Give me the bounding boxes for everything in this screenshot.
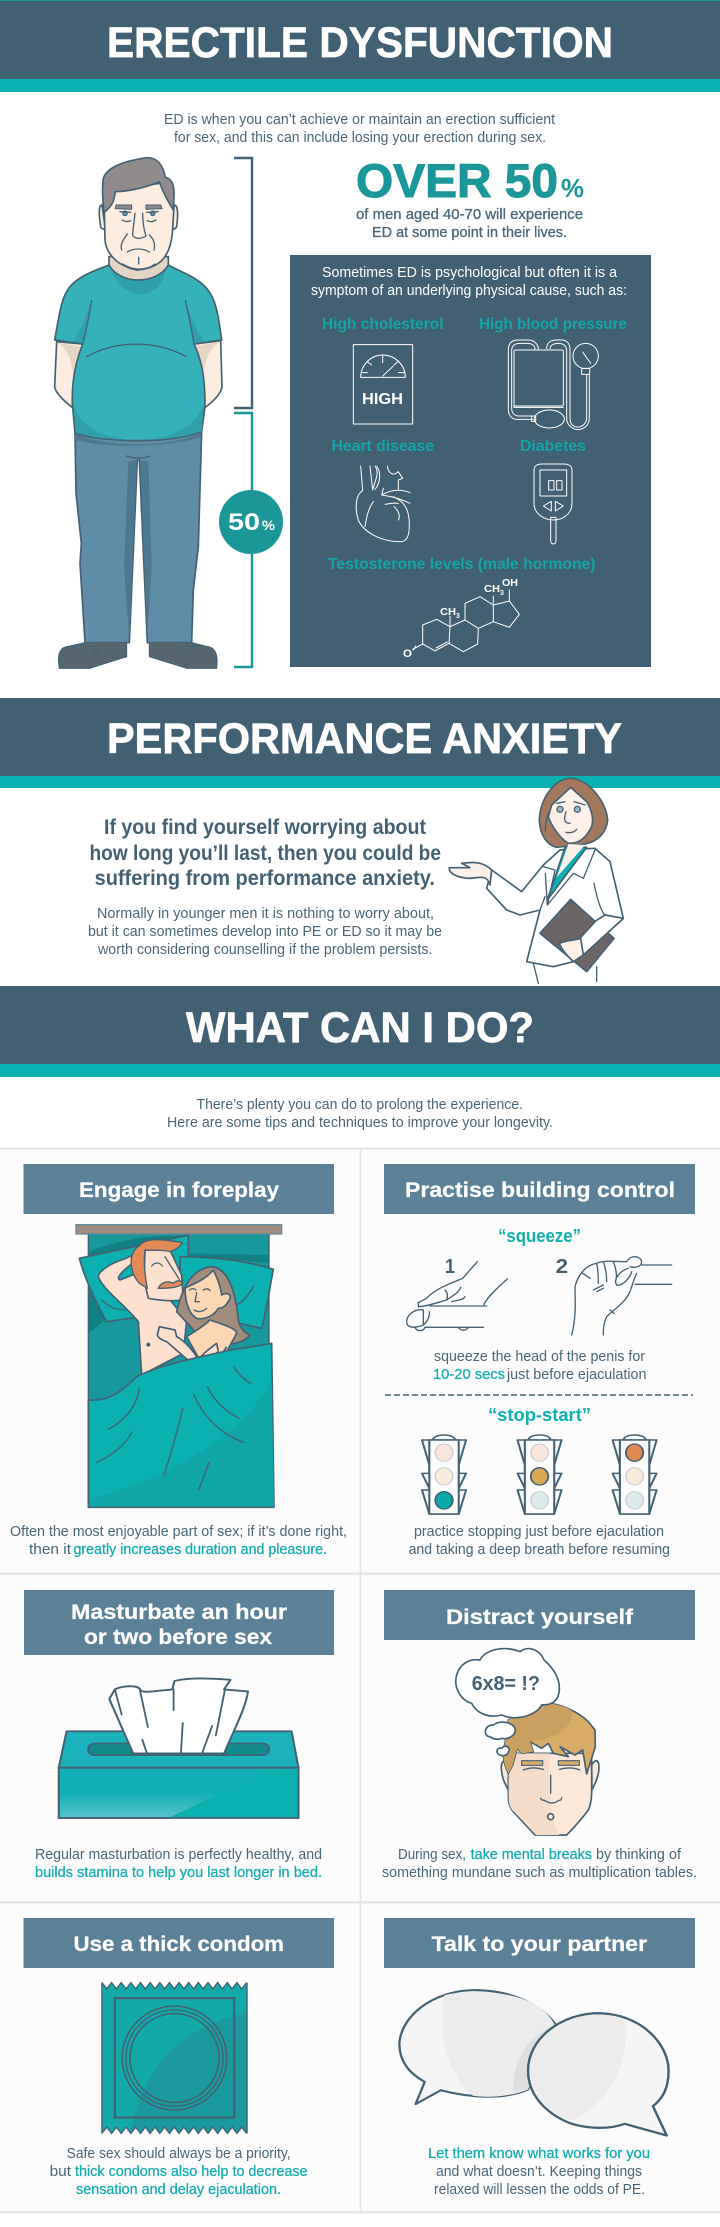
icon: testosterone molecule: O: [403, 648, 412, 660]
bracket: 50 percent of men: %: [262, 517, 276, 533]
heading: practise building control: Practise building control: [405, 1179, 675, 1202]
icon: high gauge: [353, 345, 413, 424]
caption: foreplay: greatly increases duration and pleasure.: [74, 1542, 327, 1558]
heading: distract yourself: [384, 1590, 695, 1640]
caption: condom: thick condoms also help to decrease: [75, 2164, 308, 2180]
illustration: tissue box: [59, 1678, 298, 1818]
heading: masturbate: or two before sex: [84, 1626, 272, 1649]
label: squeeze: “squeeze”: [498, 1226, 581, 1246]
caption: condom: [50, 2146, 308, 2198]
panel: physical causes: [290, 255, 651, 667]
panel: physical causes: Heart disease: [332, 438, 434, 455]
caption: stop-start: and taking a deep breath before resuming: [409, 1542, 670, 1558]
text block: performance anxiety: worth considering counselling if the problem persists.: [97, 942, 432, 958]
panel: physical causes: Sometimes ED is psychological but often it is a: [322, 265, 618, 281]
icon: high gauge: HIGH: [362, 391, 403, 408]
caption: condom: Safe sex should always be a priority,: [67, 2146, 291, 2162]
illustration: standing man: [55, 158, 222, 668]
illustration: condom packet: [101, 1981, 248, 2136]
stat: over 50 percent: %: [561, 173, 584, 203]
heading: talk to your partner: [384, 1918, 695, 1968]
intro text: [164, 112, 555, 146]
icon: blood pressure cuff: [508, 340, 598, 430]
header: performance anxiety: [0, 698, 720, 788]
label: stop-start: “stop-start”: [488, 1405, 591, 1425]
stat: over 50 percent: [356, 154, 584, 241]
text block: performance anxiety: how long you’ll last, then you could be: [90, 842, 441, 865]
header: erectile dysfunction: [0, 0, 720, 92]
caption: squeeze: [433, 1349, 646, 1383]
caption: masturbation: builds stamina to help you last longer in bed.: [35, 1865, 322, 1881]
text block: performance anxiety: Normally in younger men it is nothing to worry about,: [97, 906, 434, 922]
intro text: ED is when you can’t achieve or maintain an erection sufficient: [164, 112, 555, 128]
caption: stop-start: [409, 1524, 670, 1558]
tips grid background: [0, 1148, 720, 2214]
text block: performance anxiety: but it can sometimes develop into PE or ED so it may be: [88, 924, 442, 940]
panel: physical causes: Testosterone levels (male hormone): [328, 556, 596, 573]
caption: distract: [382, 1847, 697, 1881]
caption: foreplay: then it: [29, 1542, 71, 1558]
caption: distract: take mental breaks: [471, 1847, 592, 1863]
panel: physical causes: High cholesterol: [322, 316, 444, 333]
caption: partner: Let them know what works for you: [428, 2146, 650, 2162]
caption: stop-start: practice stopping just before ejaculation: [414, 1524, 664, 1540]
heading: talk to your partner: Talk to your partner: [432, 1933, 647, 1956]
header: what can i do: WHAT CAN I DO?: [186, 1004, 534, 1052]
icon: hand step 2: [556, 1256, 672, 1335]
panel: physical causes: symptom of an underlying physical cause, such as:: [311, 283, 627, 299]
intro: what can i do: [167, 1097, 553, 1131]
heading: practise building control: [384, 1164, 695, 1214]
text block: performance anxiety: [88, 816, 442, 958]
illustration: speech bubbles: [399, 1990, 669, 2136]
caption: foreplay: Often the most enjoyable part of sex; if it’s done right,: [10, 1524, 347, 1540]
caption: partner: relaxed will lessen the odds of PE.: [434, 2182, 645, 2198]
bracket: 50 percent of men: 50: [228, 509, 260, 536]
heading: engage in foreplay: [24, 1164, 334, 1214]
bracket: upper half of men: [234, 158, 252, 408]
caption: squeeze: 10-20 secs: [433, 1367, 505, 1383]
text block: performance anxiety: suffering from performance anxiety.: [95, 867, 435, 890]
panel: engage in foreplay: [10, 1164, 347, 1558]
stat: over 50 percent: OVER 50: [356, 154, 558, 207]
intro: what can i do: There’s plenty you can do to prolong the experience.: [196, 1097, 523, 1113]
caption: foreplay: [10, 1524, 347, 1558]
panel: distract yourself: [382, 1590, 697, 1881]
panel: practise building control: [384, 1164, 695, 1558]
text block: performance anxiety: If you find yourself worrying about: [104, 816, 426, 839]
header: what can i do: [0, 986, 720, 1077]
heading: engage in foreplay: Engage in foreplay: [79, 1179, 279, 1202]
icon: heart: [356, 466, 410, 542]
stat: over 50 percent: of men aged 40-70 will experience: [356, 207, 583, 223]
caption: partner: [428, 2146, 650, 2198]
icon: traffic lights: [422, 1435, 657, 1514]
bracket: 50 percent of men: [219, 413, 283, 667]
caption: distract: During sex,: [398, 1847, 466, 1863]
icon: testosterone molecule: CH: [440, 606, 456, 618]
icon: hand step 2: 2: [556, 1256, 568, 1278]
caption: distract: by thinking of: [596, 1847, 682, 1863]
header: erectile dysfunction: ERECTILE DYSFUNCTION: [107, 19, 613, 67]
illustration: couple in bed: [76, 1225, 282, 1507]
icon: testosterone molecule: OH: [502, 577, 518, 589]
caption: condom: sensation and delay ejaculation.: [76, 2182, 281, 2198]
caption: masturbation: Regular masturbation is perfectly healthy, and: [35, 1847, 322, 1863]
panel: thick condom: [24, 1918, 334, 2198]
icon: hand step 1: [407, 1256, 507, 1331]
caption: condom: but: [50, 2164, 71, 2180]
caption: squeeze: just before ejaculation: [506, 1367, 646, 1383]
caption: squeeze: squeeze the head of the penis for: [434, 1349, 645, 1365]
illustration: head with thought bubble: 6x8= !?: [472, 1673, 540, 1695]
heading: thick condom: [24, 1918, 334, 1968]
heading: distract yourself: Distract yourself: [446, 1606, 634, 1629]
caption: partner: and what doesn’t. Keeping things: [436, 2164, 642, 2180]
caption: masturbation: [35, 1847, 322, 1881]
illustration: head with thought bubble: [456, 1649, 599, 1835]
caption: distract: something mundane such as multiplication tables.: [382, 1865, 697, 1881]
intro: what can i do: Here are some tips and techniques to improve your longevity.: [167, 1115, 553, 1131]
panel: physical causes: High blood pressure: [479, 316, 627, 333]
heading: masturbate: [24, 1590, 334, 1655]
heading: masturbate: Masturbate an hour: [71, 1601, 287, 1624]
heading: thick condom: Use a thick condom: [74, 1933, 284, 1956]
illustration: doctor: [449, 778, 623, 983]
stat: over 50 percent: ED at some point in their lives.: [372, 225, 567, 241]
icon: testosterone molecule: CH: [484, 583, 500, 595]
panel: masturbate: [24, 1590, 334, 1881]
icon: testosterone molecule: 3: [500, 590, 504, 597]
icon: testosterone molecule: [403, 577, 519, 660]
icon: hand step 1: 1: [445, 1256, 455, 1278]
icon: glucose meter: [534, 464, 572, 544]
header: performance anxiety: PERFORMANCE ANXIETY: [107, 715, 622, 763]
icon: testosterone molecule: 3: [456, 613, 460, 620]
panel: talk to your partner: [384, 1918, 695, 2198]
panel: physical causes: Diabetes: [520, 438, 586, 455]
intro text: for sex, and this can include losing your erection during sex.: [174, 130, 546, 146]
